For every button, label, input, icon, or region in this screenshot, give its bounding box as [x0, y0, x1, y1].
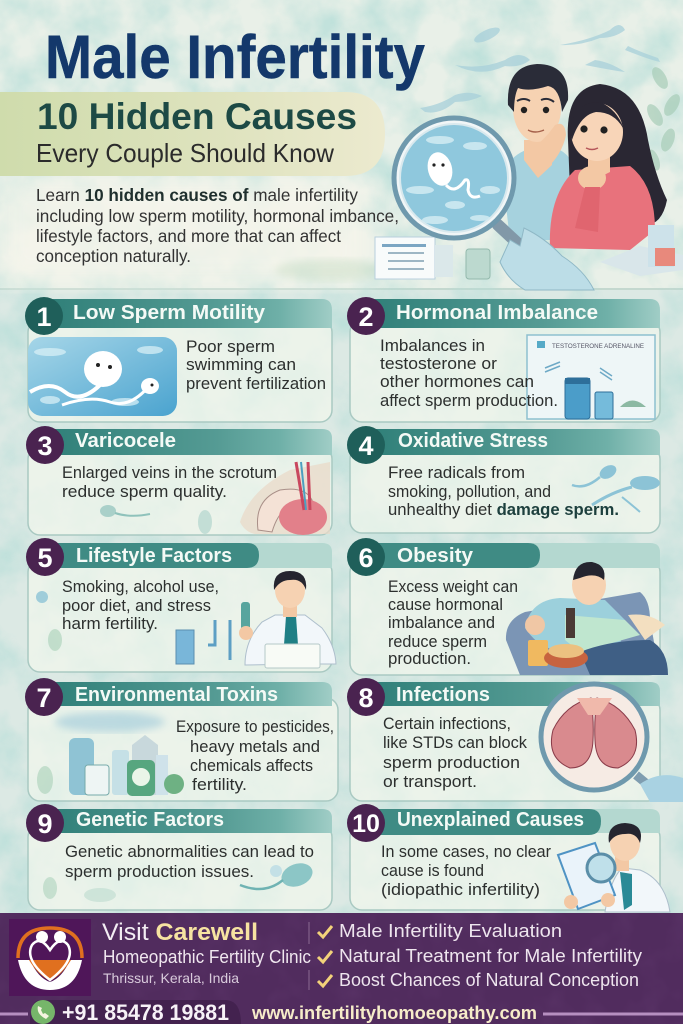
card body: [28, 320, 332, 422]
footer background: [0, 913, 683, 1024]
description: [176, 718, 334, 794]
services checklist: [318, 921, 642, 990]
number badge: 9: [37, 809, 53, 839]
number badge: 4: [358, 431, 374, 461]
description: swimming can: [186, 356, 296, 374]
icon: doctor with report and magnifier: [558, 823, 670, 912]
illustration: clipboard and jars: [375, 225, 683, 279]
description: unhealthy diet damage sperm.: [388, 501, 619, 519]
heading: Hormonal Imbalance: [396, 302, 598, 324]
intro text: including low sperm motility, hormonal imbance,: [36, 206, 399, 226]
heading: Lifestyle Factors: [76, 545, 232, 567]
icon: sperm with abnormal DNA: [43, 859, 316, 902]
logo: [9, 919, 91, 996]
header bar: [366, 543, 660, 568]
services checklist: Male Infertility Evaluation: [339, 921, 562, 941]
description: Genetic abnormalities can lead to: [65, 843, 314, 861]
heading: Environmental Toxins: [75, 684, 278, 706]
description: Free radicals from: [388, 464, 525, 482]
number badge: 5: [37, 543, 53, 573]
header bar: [44, 682, 332, 706]
description: [388, 464, 619, 519]
intro text: [36, 185, 399, 266]
clinic type: Homeopathic Fertility Clinic: [103, 947, 311, 967]
icon: lab report and sample jars: TESTOSTERONE ADRENALINE: [552, 344, 644, 350]
header bar: [45, 809, 332, 833]
icon: magnifying glass with sperm: [394, 118, 525, 250]
card body: [28, 698, 338, 801]
clinic name: Visit Carewell: [102, 919, 258, 946]
number badge: 2: [358, 302, 374, 332]
heading: Unexplained Causes: [397, 809, 584, 831]
description: chemicals affects: [190, 757, 313, 775]
number badge: 1: [36, 302, 52, 332]
phone pill: [30, 1000, 241, 1024]
number badge: 7: [36, 683, 52, 713]
heading: Infections: [396, 684, 490, 706]
icon: magnified infected anatomy: [541, 684, 683, 802]
description: reduce sperm quality.: [62, 483, 227, 501]
description: fertility.: [192, 776, 247, 794]
card body: [350, 447, 660, 533]
panel: hormonal imbalance: [347, 297, 660, 422]
description: [65, 843, 314, 881]
panel: environmental toxins: [25, 678, 338, 801]
header pill: [45, 543, 259, 568]
icon: doctor with lab equipment: [36, 571, 336, 668]
card body: [350, 560, 660, 675]
description: [381, 843, 551, 899]
panel: low sperm motility: [25, 297, 332, 422]
description: harm fertility.: [62, 615, 158, 633]
intro text: Learn 10 hidden causes of male infertility: [36, 185, 358, 205]
panel: unexplained causes: [347, 804, 670, 912]
icon: gloved hand: [500, 228, 594, 290]
number badge: 8: [358, 683, 374, 713]
description: heavy metals and: [190, 738, 320, 756]
card body: [350, 698, 660, 801]
card body: [350, 825, 660, 910]
panel: obesity: [347, 538, 668, 675]
number badge: 10: [352, 810, 380, 838]
number badge: [26, 538, 64, 576]
subtitle ribbon: [0, 92, 385, 176]
number badge: 3: [37, 431, 53, 461]
description: cause is found: [381, 862, 484, 880]
description: [186, 338, 326, 393]
header bar: [366, 299, 660, 328]
title: Male Infertility: [45, 23, 425, 91]
icon: toxic chemical bottles: [37, 712, 184, 796]
description: other hormones can: [380, 373, 534, 391]
heading: Genetic Factors: [76, 809, 224, 831]
description: smoking, pollution, and: [388, 483, 551, 501]
number badge: [347, 426, 385, 464]
description: production.: [388, 650, 471, 668]
illustration: worried couple: [502, 64, 667, 250]
description: prevent fertilization: [186, 375, 326, 393]
description: cause hormonal: [388, 596, 503, 614]
header bar: [366, 682, 660, 706]
icon: varicocele anatomy: [100, 462, 330, 535]
icon: phone: [31, 1000, 55, 1024]
panel: lifestyle factors: [26, 538, 336, 672]
heading: Oxidative Stress: [398, 430, 548, 452]
number badge: [347, 297, 385, 335]
woman: [550, 84, 667, 250]
description: [388, 578, 518, 668]
services checklist: Boost Chances of Natural Conception: [339, 970, 639, 990]
description: [62, 464, 277, 501]
number badge: [347, 804, 385, 842]
subtitle: 10 hidden causes: 10 Hidden Causes: [37, 96, 357, 137]
description: In some cases, no clear: [381, 843, 551, 861]
description: Excess weight can: [388, 578, 518, 596]
description: Smoking, alcohol use,: [62, 578, 219, 596]
clinic location: Thrissur, Kerala, India: [103, 970, 239, 986]
header pill: [366, 543, 540, 568]
number badge: [26, 426, 64, 464]
card body: [28, 447, 332, 535]
header pill: [366, 809, 601, 835]
number badge: [25, 678, 63, 716]
description: like STDs can block: [383, 734, 528, 752]
description: testosterone or: [380, 355, 498, 373]
number badge: [347, 538, 385, 576]
icon: lab report and sample jars: [527, 335, 655, 419]
description: [380, 337, 558, 410]
icon: swimming sperm: [28, 337, 177, 416]
number badge: [26, 804, 64, 842]
header bar: [45, 543, 332, 568]
description: sperm production: [383, 754, 520, 772]
description: or transport.: [383, 773, 477, 791]
icon: sperm cells: [572, 462, 660, 512]
contact strip lines: [0, 1012, 683, 1016]
description: [383, 715, 528, 791]
services checklist: Natural Treatment for Male Infertility: [339, 946, 642, 966]
panel: infections: [347, 678, 683, 802]
description: Imbalances in: [380, 337, 485, 355]
number badge: [347, 678, 385, 716]
description: imbalance and: [388, 614, 495, 632]
number badge: [25, 297, 63, 335]
description: reduce sperm: [388, 633, 487, 651]
icon: man on sofa with food: [506, 562, 668, 675]
divider: [308, 922, 310, 990]
heading: Varicocele: [75, 430, 176, 452]
subtitle: every couple should know: Every Couple Should Know: [36, 138, 334, 168]
heading: Low Sperm Motility: [73, 302, 266, 324]
description: Certain infections,: [383, 715, 511, 733]
intro text: conception naturally.: [36, 246, 191, 266]
panel: varicocele: [26, 426, 332, 535]
description: affect sperm production.: [380, 392, 558, 410]
description: Exposure to pesticides,: [176, 718, 334, 736]
footer: [0, 913, 683, 1024]
card body: [28, 825, 332, 910]
header bar: [44, 299, 332, 328]
description: poor diet, and stress: [62, 597, 211, 615]
website: www.infertilityhomoeopathy.com: [251, 1003, 537, 1023]
number badge: 6: [358, 543, 374, 573]
description: (idiopathic infertility): [381, 881, 540, 899]
description: Enlarged veins in the scrotum: [62, 464, 277, 482]
heading: Obesity: [397, 545, 474, 567]
man: [502, 64, 590, 240]
decorative sperm wisps: [420, 25, 660, 113]
header bar: [366, 809, 660, 833]
panel: genetic factors: [26, 804, 332, 910]
intro text: lifestyle factors, and more that can affect: [36, 226, 341, 246]
header bar: [366, 429, 660, 455]
description: [62, 578, 219, 633]
card body: [350, 320, 660, 422]
header bar: [45, 429, 332, 455]
card body: [28, 560, 332, 672]
panel: oxidative stress: [347, 426, 660, 533]
description: Poor sperm: [186, 338, 275, 356]
description: sperm production issues.: [65, 863, 254, 881]
leaves right: [644, 65, 683, 172]
